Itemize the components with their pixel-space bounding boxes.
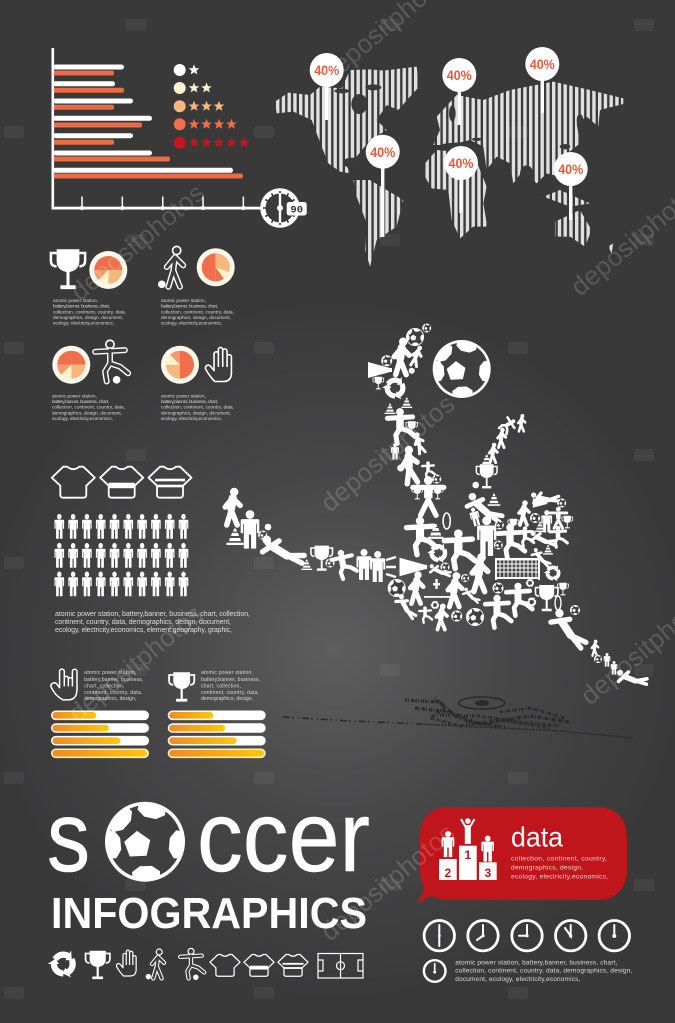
map pins with percentages (310, 47, 588, 237)
text block 6: continent, country, data, (201, 690, 259, 696)
watermark text: depositphotos (65, 178, 210, 307)
text block 1 (53, 298, 126, 326)
goal net (495, 558, 540, 580)
title: s: s (47, 781, 90, 893)
icon: pitch (318, 954, 363, 978)
text block 3 (52, 394, 125, 421)
text block 6 (201, 670, 260, 702)
text block 2: atomic power station, (161, 298, 206, 303)
data text: collection, continent, country, (511, 856, 607, 862)
pie chart 3 (52, 346, 90, 384)
text block: clocks: atomic power station, battery,banner, business, chart, (455, 960, 617, 966)
text block 5: chart, collection, (84, 683, 124, 689)
progress bars right (168, 710, 266, 758)
text block 6: battery,banner, business, (201, 677, 260, 683)
text block 3: atomic power station, (52, 394, 97, 398)
small clock (424, 960, 446, 982)
pie chart 2 (197, 248, 235, 286)
podium icon: 3 (484, 866, 491, 880)
star rating legend (174, 64, 249, 149)
text block 6: atomic power station, (201, 670, 253, 676)
big soccer ball (433, 340, 491, 398)
text block 3: battery,banner, business, chart, (52, 399, 109, 404)
text block 5 (84, 670, 143, 702)
left leg icons (225, 488, 484, 630)
text block 2: collection, continent, country, data, (161, 309, 234, 314)
text block: people: continent, country, data, demographics, design, document, (55, 619, 231, 626)
text block 2: demographics, design, document, (161, 315, 231, 320)
clocks (424, 920, 630, 951)
data heading: data (511, 822, 563, 853)
data text: demographics, design, (511, 864, 583, 872)
text block 4: collection, continent, country, data, (161, 405, 234, 410)
icon: trophy (51, 249, 85, 289)
player silhouette made of icons (225, 324, 647, 687)
icon row (47, 948, 308, 980)
icon: small trophy (169, 672, 194, 702)
striped world map (276, 66, 624, 266)
text block 3: ecology, electricity,economics, (52, 416, 113, 421)
text block 6: demographics, design, (201, 696, 253, 702)
text block 1: collection, continent, country, data, (53, 309, 126, 314)
text block 5: demographics, design, (84, 696, 136, 702)
bar chart (52, 48, 264, 210)
podium icon (439, 818, 497, 880)
title ball (105, 802, 185, 882)
text block 2 (161, 298, 234, 326)
data text: ecology, electricity,economics, (511, 874, 608, 880)
text block: people: atomic power station, battery,banner, business, chart, collection, (55, 611, 250, 618)
upper arm icons (368, 324, 444, 515)
map pins with percentages: 40% (558, 161, 584, 177)
text block 1: ecology, electricity,economics, (53, 320, 114, 326)
text block 6: chart, collection, (201, 683, 241, 689)
title: ccer: ccer (197, 781, 370, 893)
map pins with percentages: 40% (530, 56, 555, 72)
text block 4: ecology, electricity,economics, (161, 416, 222, 421)
torso icons (406, 513, 488, 592)
text block 3: demographics, design, document, (52, 410, 122, 415)
text block 4: atomic power station, (161, 394, 206, 398)
text block 4: battery,banner, business, chart, (161, 399, 218, 404)
watermark text: depositphotos (315, 818, 460, 947)
text block 5: continent, country, data, (84, 690, 142, 696)
shirts (52, 467, 192, 498)
icon: hand (205, 347, 231, 382)
text block 2: ecology, electricity,economics, (161, 320, 222, 326)
ground shadow of player (283, 697, 633, 738)
text block 3: collection, continent, country, data, (52, 405, 125, 410)
icon: stopwatch 90: 90 (290, 205, 303, 217)
right arm icons (464, 414, 573, 567)
watermark text: depositphotos (315, 389, 460, 518)
pie chart 1 (89, 251, 127, 289)
right leg icons (485, 565, 647, 687)
text block 1: atomic power station, (53, 298, 98, 303)
people pictogram grid (54, 514, 188, 596)
watermark text: depositphotos (63, 599, 208, 728)
podium icon: 2 (444, 866, 451, 880)
progress bars left (51, 710, 149, 758)
panel: red data bubble (417, 807, 627, 902)
text block 1: demographics, design, document, (53, 315, 123, 320)
pie chart 4 (161, 346, 199, 384)
text block: clocks: collection, continent, country, data, demographics, design, (455, 968, 632, 975)
icon: kicking player (95, 340, 128, 384)
map pins with percentages: 40% (448, 155, 474, 171)
podium icon: 1 (464, 848, 471, 862)
text block: people: ecology, electricity,economics, element,geography, graphic, (55, 627, 232, 634)
icon: rock hand (51, 669, 77, 700)
text block 5: battery,banner, business, (84, 677, 143, 683)
text block 4: demographics, design, document, (161, 410, 231, 415)
data text (511, 856, 608, 880)
map pins with percentages: 40% (314, 62, 340, 78)
text block: clocks (455, 960, 632, 983)
icon: stopwatch 90 (260, 188, 307, 228)
text block 1: battery,banner, business, chart, (53, 304, 110, 309)
text block: clocks: document, ecology, electricity,economics, (455, 976, 580, 983)
map pins with percentages: 40% (370, 144, 396, 160)
text block 4 (161, 394, 234, 421)
map pins with percentages: 40% (447, 67, 472, 83)
text block 2: battery,banner, business, chart, (161, 304, 218, 309)
icon: walking player (158, 246, 183, 288)
text block: people (55, 611, 250, 634)
text block 5: atomic power station, (84, 670, 136, 676)
subtitle: infographics: INFOGRAPHICS (51, 889, 367, 938)
